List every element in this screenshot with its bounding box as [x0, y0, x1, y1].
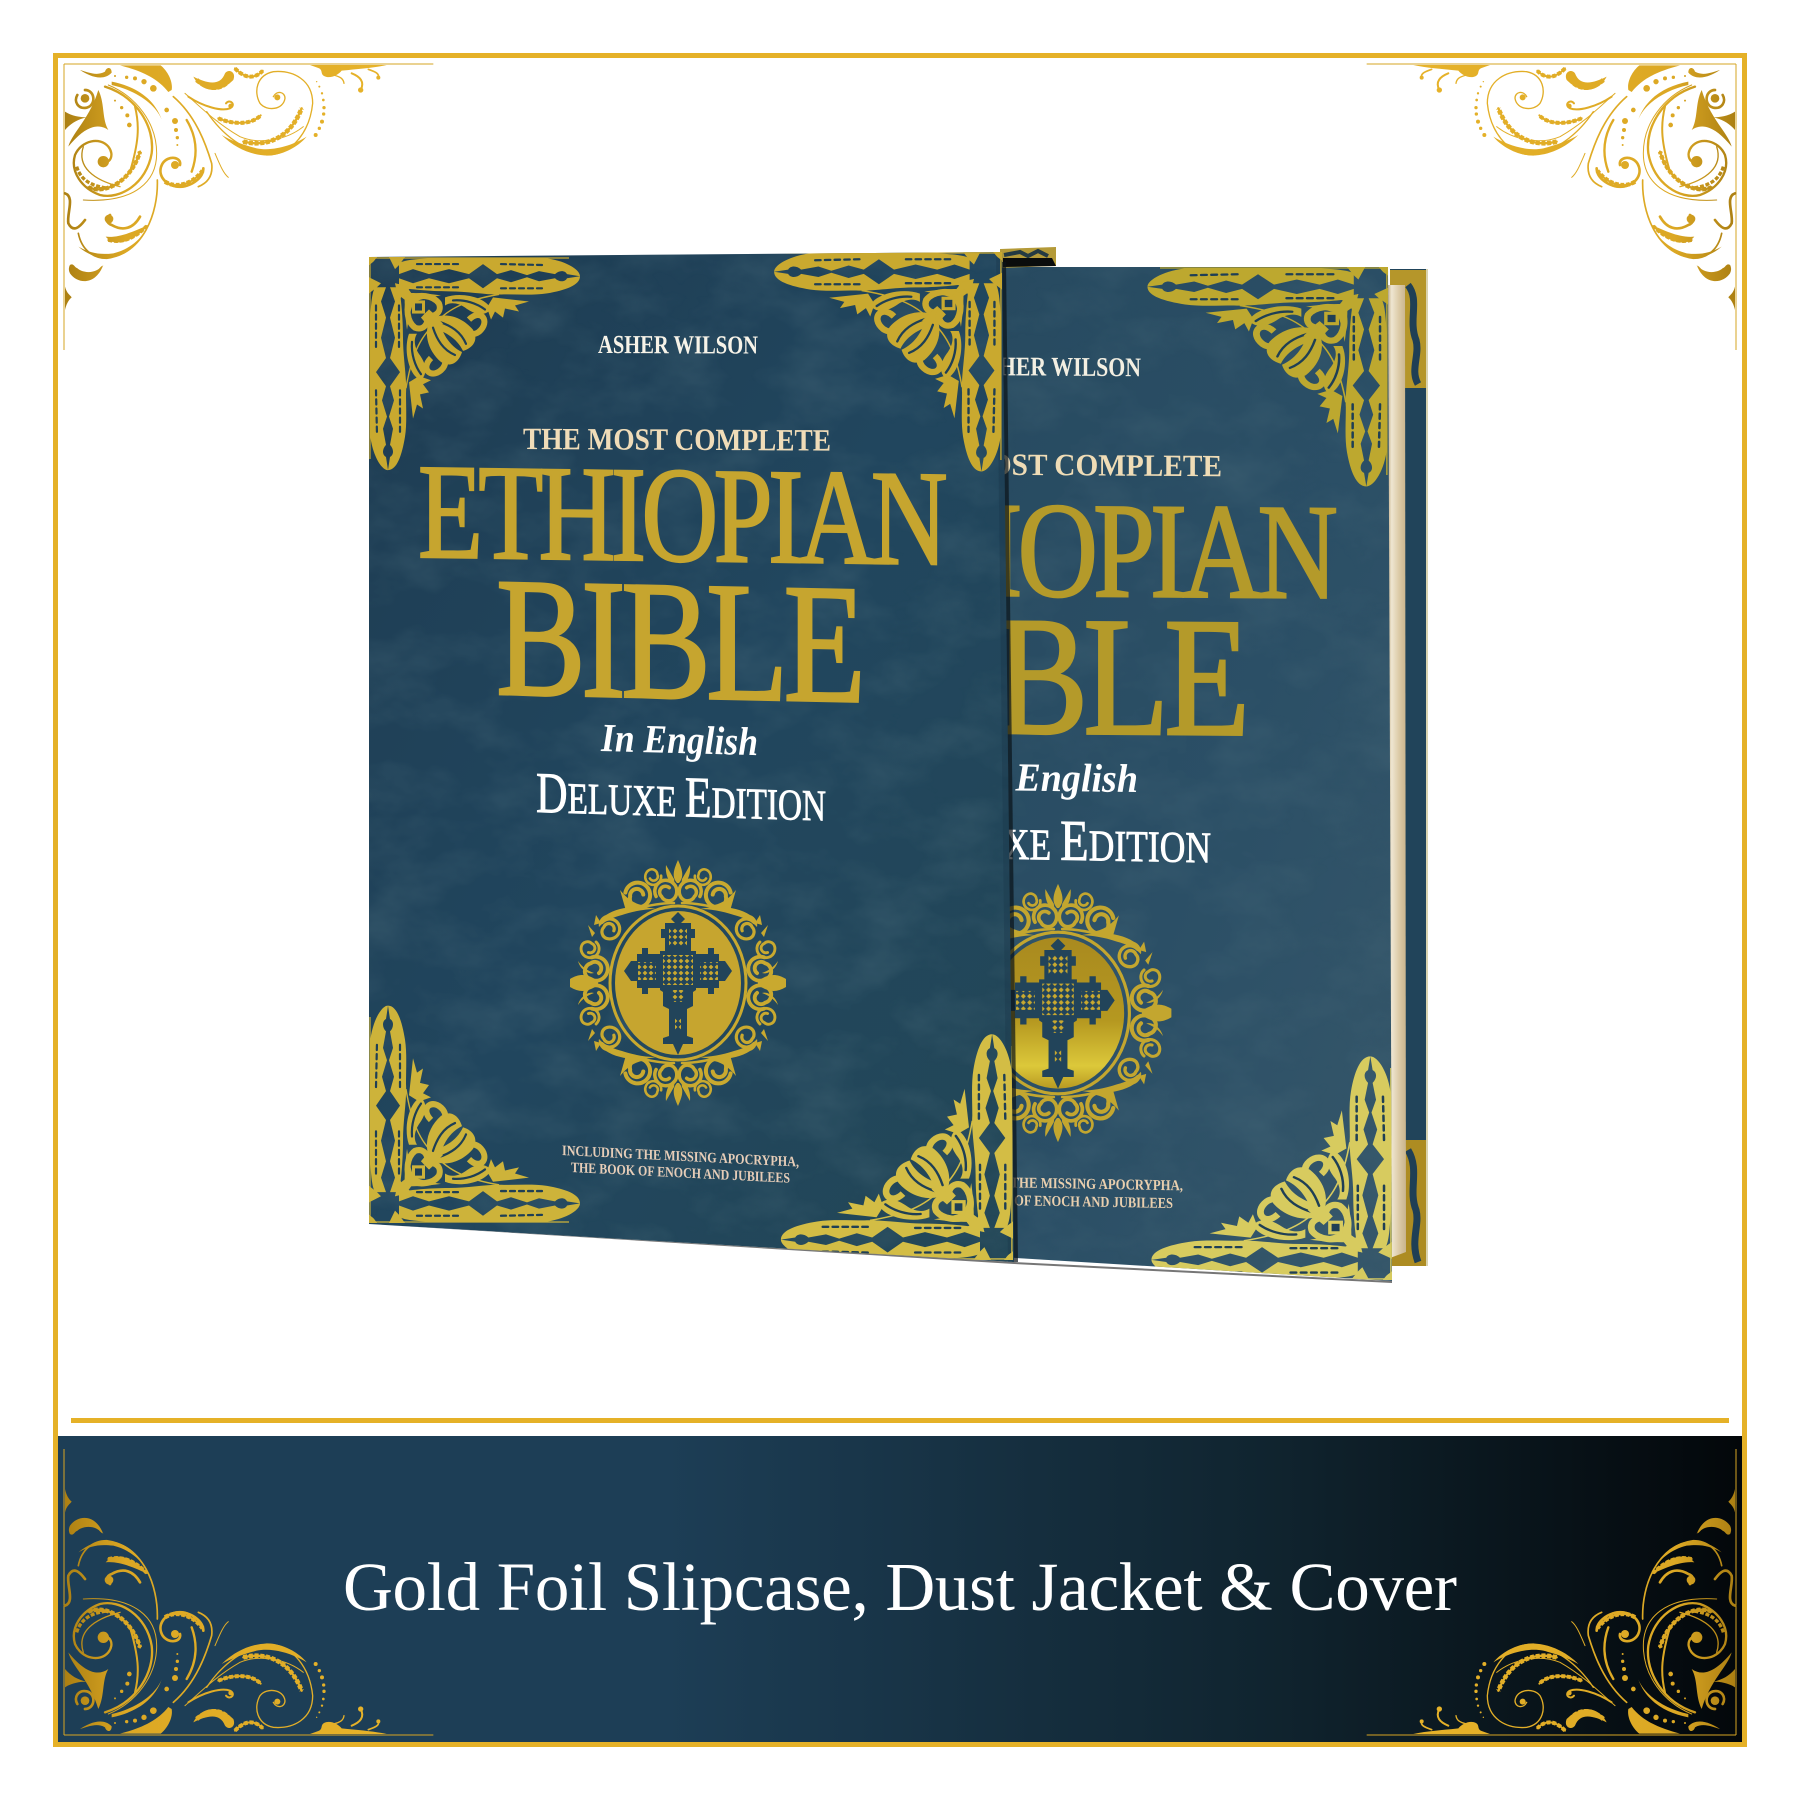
slipcase title line 1: ETHIOPIAN: [418, 437, 946, 594]
jacket subtitle: In English: [969, 754, 1138, 801]
slipcase top right ornament: [774, 252, 1002, 471]
jacket tagline: [933, 1174, 1183, 1212]
slipcase tagline: INCLUDING THE MISSING APOCRYPHA,: [562, 1143, 799, 1171]
slipcase author: ASHER WILSON: [598, 330, 758, 360]
jacket medallion: [945, 884, 1171, 1142]
slipcase bottom left ornament: [369, 1006, 580, 1223]
slipcase medallion: [570, 860, 786, 1106]
book page block: [1388, 285, 1406, 1258]
bottom banner: [58, 1436, 1742, 1742]
slipcase subtitle: In English: [600, 715, 758, 764]
slipcase top left ornament: [369, 257, 580, 470]
slipcase mottled texture: [369, 252, 1015, 1263]
jacket edition: DELUXE EDITION: [901, 805, 1211, 875]
jacket kicker: THE MOST COMPLETE: [892, 446, 1222, 483]
book dust jacket: [784, 267, 1395, 1287]
jacket mottled texture: [1023, 391, 1270, 1177]
slipcase inner shadow: [1000, 262, 1018, 1262]
slipcase fold: [996, 252, 1014, 1262]
jacket author: ASHER WILSON: [971, 351, 1141, 382]
slipcase title line 2: BIBLE: [496, 543, 861, 739]
slipcase front: [369, 252, 1015, 1263]
jacket title line 1: ETHIOPIAN: [784, 474, 1336, 628]
ornament: bottom right flourish: [1367, 1449, 1736, 1735]
slipcase edition: DELUXE EDITION: [536, 760, 826, 834]
slipcase top edge: [1000, 247, 1056, 268]
ornament: bottom left flourish: [64, 1449, 433, 1735]
product: book and slipcase: [369, 247, 1428, 1287]
slipcase tagline: THE BOOK OF ENOCH AND JUBILEES: [571, 1160, 790, 1187]
ornament: top right flourish: [1367, 64, 1736, 350]
jacket bottom right ornament: [1151, 1056, 1392, 1280]
slipcase kicker: THE MOST COMPLETE: [523, 421, 831, 458]
jacket top right ornament: [1147, 267, 1388, 486]
floor shadow: [369, 1224, 1392, 1283]
slipcase tagline: [562, 1143, 799, 1187]
divider line: [71, 1418, 1729, 1423]
slipcase bottom right ornament: [781, 1034, 1013, 1260]
jacket tagline: THE BOOK OF ENOCH AND JUBILEES: [944, 1192, 1173, 1212]
ornament: top left flourish: [64, 64, 433, 350]
jacket tagline: INCLUDING THE MISSING APOCRYPHA,: [933, 1174, 1183, 1194]
jacket title line 2: BIBLE: [864, 581, 1245, 772]
banner caption: Gold Foil Slipcase, Dust Jacket & Cover: [343, 1549, 1457, 1625]
book back cover: [1390, 269, 1428, 1266]
